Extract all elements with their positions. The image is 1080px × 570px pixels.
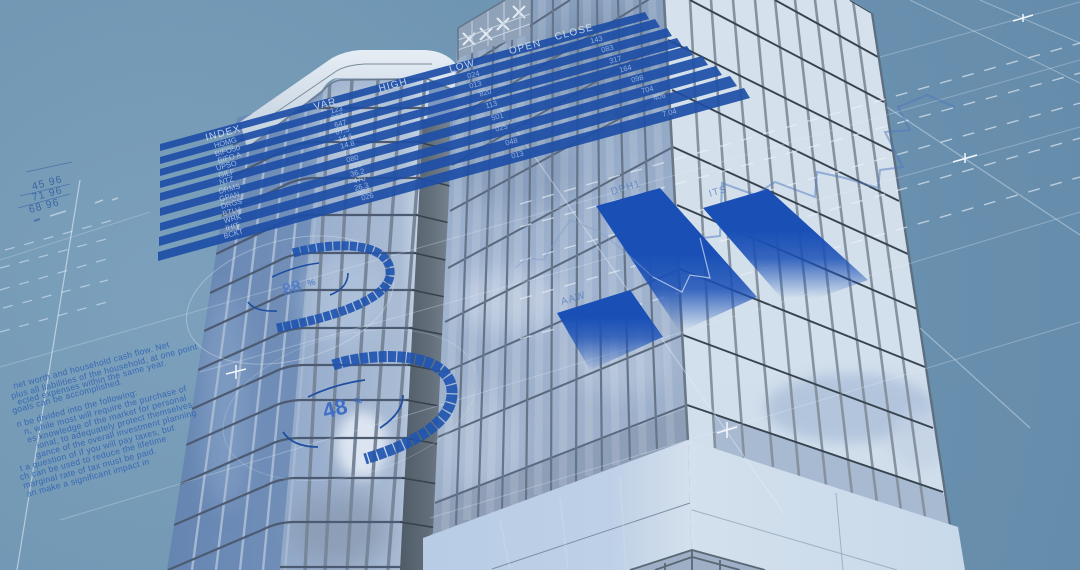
right face mullions	[664, 0, 925, 517]
chart series labels: AAW	[560, 290, 587, 308]
table ticker column: BCKT	[223, 227, 245, 241]
podium right face	[688, 440, 965, 570]
gauge value: 88	[280, 277, 303, 300]
table close column: 704	[640, 84, 655, 96]
gauge inner arcs	[283, 380, 403, 447]
blue bars	[557, 188, 868, 370]
table low column: 501	[490, 111, 505, 123]
table column headers: OPEN	[508, 38, 543, 57]
table close column: 143	[589, 34, 604, 46]
table value column: 67.5	[334, 124, 351, 137]
gauge: 88 percent	[248, 246, 390, 328]
table close column: 406	[652, 91, 667, 103]
left face floors	[435, 0, 687, 503]
line chart trace	[703, 95, 955, 238]
financial planning paragraph: es knowledge of the market for personal	[26, 392, 188, 445]
financial planning paragraph: n be divided into the following:	[15, 387, 139, 429]
table value column: 14.6	[337, 131, 354, 144]
table value column: 026	[360, 191, 375, 203]
sparkles	[226, 14, 1033, 438]
right tower outer edge	[872, 13, 950, 525]
table ticker column	[213, 135, 245, 241]
right face floors	[668, 0, 943, 492]
table ticker column: GILF	[217, 167, 236, 180]
table close column: 164	[618, 63, 633, 75]
table value column	[329, 104, 375, 203]
table value column: 470	[352, 174, 367, 186]
financial planning paragraph: goals can be accomplished.	[11, 376, 124, 415]
financial planning paragraph: gance of the overall investment planning	[35, 407, 198, 460]
gauge: 48 percent	[283, 357, 452, 459]
table ticker column: BIFO50	[214, 143, 241, 158]
financial planning paragraph: t a question of if you will pay taxes, but	[19, 422, 176, 473]
table value column: 36.2	[349, 166, 366, 179]
tower roof cap	[240, 50, 456, 148]
table ticker column: WRK	[223, 212, 242, 225]
table ticker column: GPAN	[218, 190, 241, 204]
table close column: 098	[630, 73, 645, 85]
table value column: 26.3	[353, 180, 370, 193]
table value column: 060	[343, 146, 358, 158]
top left figures: 45 96	[31, 173, 64, 193]
tower curved floors	[168, 108, 430, 570]
table column headers: INDEX	[204, 124, 242, 144]
tower glass body	[160, 70, 460, 570]
table value column: 867	[330, 111, 345, 123]
table low column: 025	[494, 122, 509, 134]
table ticker column: BTLV	[221, 205, 241, 218]
table ticker column: HOMG	[213, 135, 238, 150]
table ticker column: DRGS	[220, 196, 243, 211]
tower dark service core	[400, 120, 450, 570]
table close column: 317	[608, 54, 623, 66]
tower mullions	[192, 100, 325, 570]
chart series labels: ITS	[708, 184, 729, 200]
table low column: 048	[504, 136, 519, 148]
gauge inner arcs	[248, 263, 348, 311]
faint line chart trace on glass	[515, 220, 653, 277]
table low column: 820	[478, 87, 493, 99]
table low column: 113	[484, 99, 498, 110]
financial planning paragraph: ected expenses within the same year.	[16, 357, 168, 407]
table column headers: VAR	[313, 96, 338, 113]
financial planning paragraph: plus all liabilities of the household, at one point	[10, 341, 199, 401]
table value column: 647	[333, 118, 348, 130]
table ticker column: BIFO A	[217, 150, 242, 165]
bar: left	[557, 290, 663, 370]
table close column: 083	[600, 43, 615, 55]
top left figures	[18, 162, 118, 221]
right tower corner mullion	[664, 0, 688, 442]
table value column: 080	[345, 153, 360, 165]
financial planning paragraph: marginal rate of tax must be paid.	[22, 445, 158, 491]
table column headers: CLOSE	[554, 22, 595, 43]
gauge value: %	[306, 277, 317, 288]
dashed grid right	[520, 43, 1080, 339]
top left figures: 68 96	[28, 196, 61, 216]
table column headers: LOW	[448, 58, 477, 75]
dashed grid left	[0, 220, 113, 332]
gauge ring	[277, 246, 390, 328]
chart series labels: DPH1	[610, 178, 642, 198]
bar: middle	[596, 188, 757, 332]
pane reflections	[445, 0, 671, 530]
table column headers	[204, 22, 595, 144]
financial planning paragraph: net worth and household cash flow. Net	[12, 339, 171, 391]
gauge value: %	[353, 395, 363, 407]
gauge value: 48	[320, 393, 350, 424]
rooftop lattice	[458, 0, 530, 60]
table low column: 024	[466, 69, 481, 81]
bar: right	[703, 189, 868, 308]
line chart trace over bars	[653, 238, 710, 292]
financial planning paragraph: ch can be used to reduce the lifetime	[19, 433, 168, 482]
chart series labels	[560, 178, 729, 308]
left face mullions	[456, 0, 657, 525]
table ticker column: IHIT	[224, 220, 241, 233]
financial planning paragraph: ional, to adequately protect themselves	[36, 399, 194, 451]
table value column: 14.8	[339, 138, 356, 151]
market data table	[158, 12, 750, 261]
table ticker column: UPSO	[215, 158, 238, 173]
table ticker column: NTZ	[218, 174, 235, 187]
table value column: 123	[329, 104, 344, 116]
table value column: 038	[348, 160, 363, 172]
table value column: 95.9	[356, 185, 373, 198]
table column headers: HIGH	[378, 76, 409, 95]
table low column	[466, 69, 525, 161]
table close column	[589, 34, 678, 119]
table close column: 7.04	[661, 106, 678, 119]
top left figures: 71 96	[31, 184, 64, 204]
table row stripes	[158, 12, 750, 261]
right tower bright right face	[660, 0, 960, 530]
table low column: 013	[510, 149, 525, 161]
financial planning paragraph: an make a significant impact in	[25, 456, 151, 499]
podium lower window	[630, 550, 765, 570]
financial planning paragraph	[10, 339, 199, 499]
gauge ring	[333, 357, 452, 459]
table low column: 013	[468, 79, 483, 91]
financial planning paragraph: n, while most will require the purchase of	[23, 383, 188, 436]
table ticker column: DRMS	[218, 181, 241, 196]
right tower	[420, 0, 965, 570]
left curved tower	[160, 50, 460, 570]
podium left face	[423, 440, 692, 570]
right tower glass left face	[430, 0, 686, 536]
